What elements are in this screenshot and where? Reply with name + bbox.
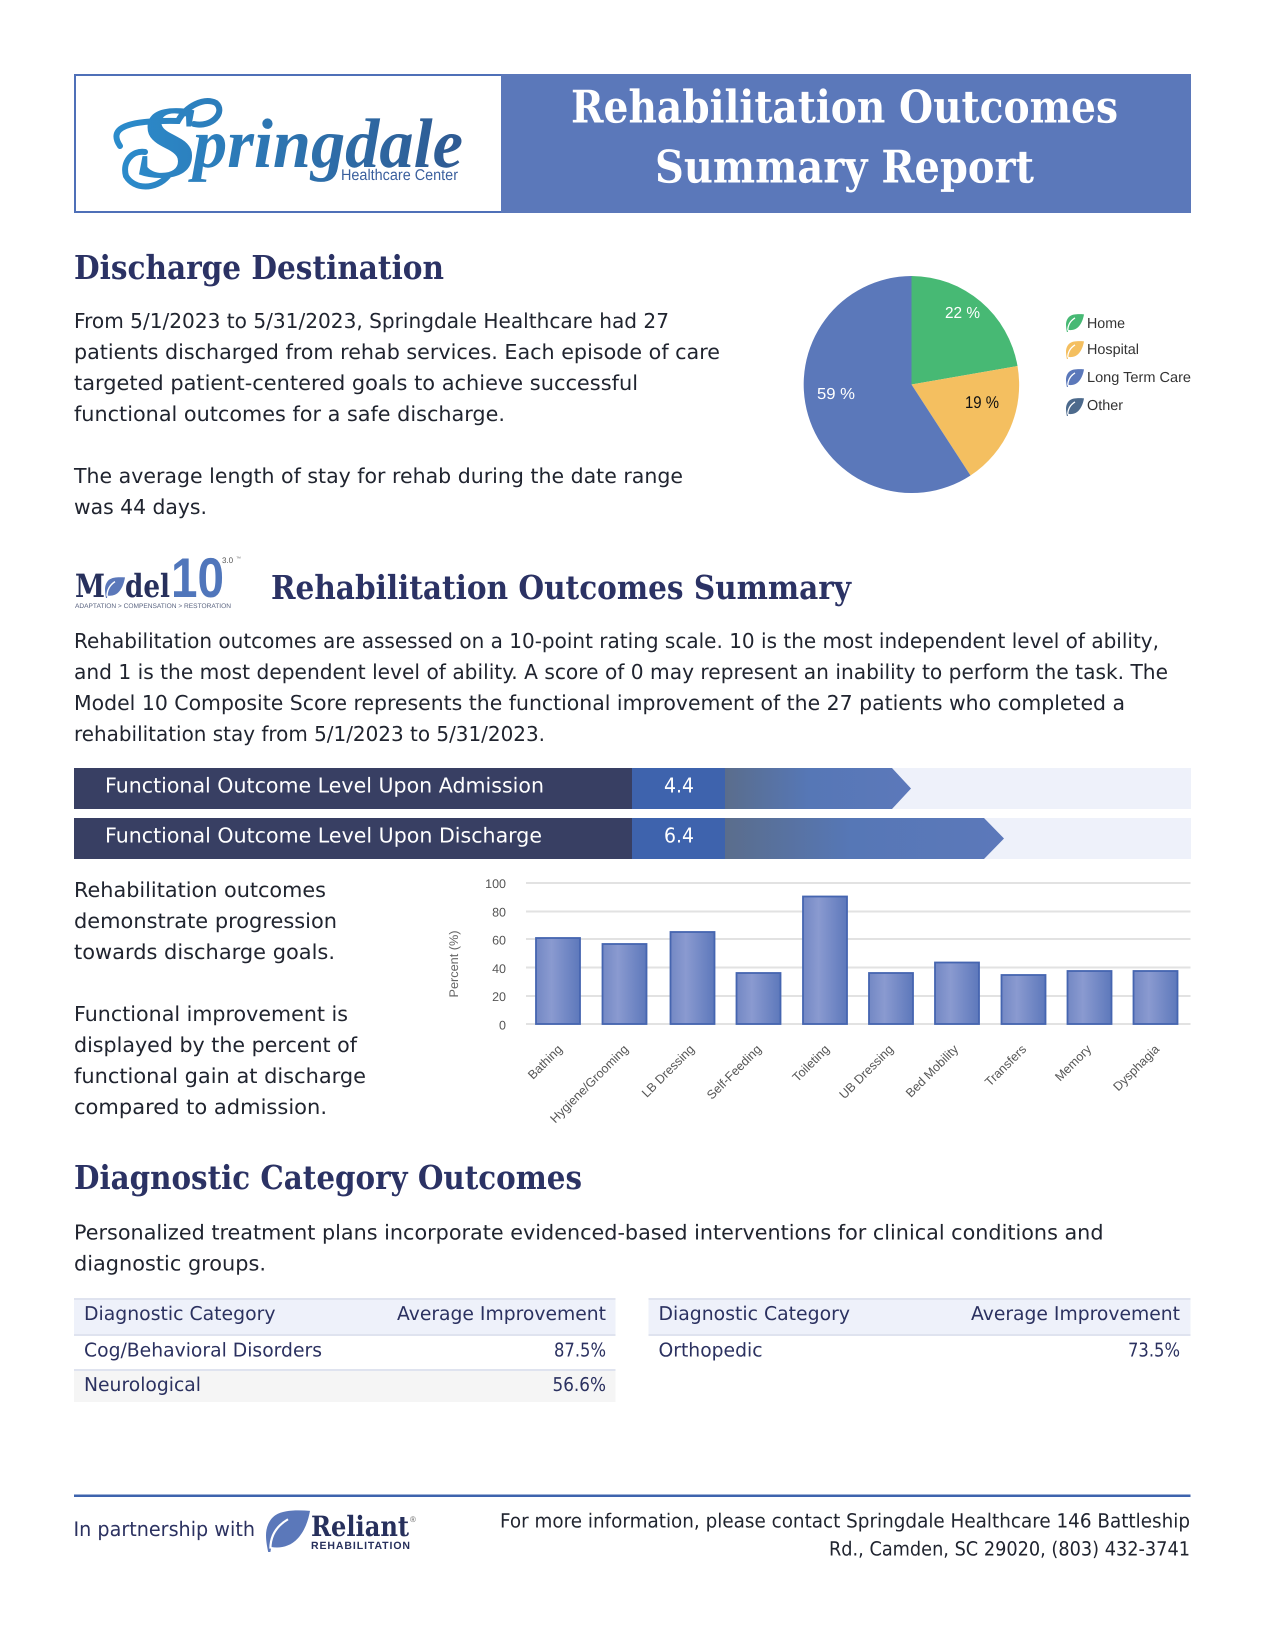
pie legend bbox=[1066, 314, 1191, 416]
text block: rating scale explanation: rehabilitation stay from 5/1/2023 to 5/31/2023. bbox=[74, 722, 545, 746]
legend item: Other: Other bbox=[1087, 398, 1123, 414]
x axis category labels: LB Dressing bbox=[639, 1042, 697, 1100]
text block: rating scale explanation: Rehabilitation outcomes are assessed on a 10-point rating scale. 10 is the most independent level of ability, bbox=[74, 629, 1159, 653]
pie chart: discharge destination: 19 % bbox=[965, 393, 999, 412]
x axis category labels: Toileting bbox=[790, 1042, 832, 1085]
Model 10 logo: del bbox=[125, 567, 170, 605]
report title: Rehabilitation Outcomes bbox=[571, 80, 1118, 134]
header banner bbox=[75, 74, 1191, 213]
legend item: Hospital: Hospital bbox=[1087, 342, 1139, 358]
table: left diagnostic categories: Average Improvement bbox=[397, 1303, 606, 1325]
footer: contact information bbox=[500, 1510, 1190, 1560]
score bar: discharge: 6.4 bbox=[664, 824, 694, 848]
table: left diagnostic categories: 87.5% bbox=[554, 1340, 606, 1362]
footer: partnership credit: In partnership with bbox=[74, 1517, 255, 1541]
text block: functional improvement: towards discharge goals. bbox=[74, 940, 335, 964]
pie chart: discharge destination bbox=[804, 276, 1019, 493]
gridlines and y axis ticks: 80 bbox=[492, 906, 506, 920]
text block: functional improvement: Functional improvement is bbox=[74, 1002, 348, 1026]
x axis category labels: UB Dressing bbox=[837, 1042, 896, 1102]
text block: rating scale explanation bbox=[74, 629, 1168, 746]
x axis category labels bbox=[525, 1042, 1162, 1126]
table: right diagnostic categories: Average Improvement bbox=[971, 1303, 1180, 1325]
score bar: discharge: Functional Outcome Level Upon Discharge bbox=[105, 824, 542, 848]
x axis category labels: Memory bbox=[1052, 1042, 1095, 1084]
text block: discharge summary: From 5/1/2023 to 5/31/2023, Springdale Healthcare had 27 bbox=[74, 309, 669, 333]
text block: functional improvement bbox=[74, 878, 366, 1119]
Reliant Rehabilitation wordmark: ® bbox=[410, 1515, 416, 1524]
text block: functional improvement: displayed by the percent of bbox=[74, 1033, 358, 1057]
gridlines and y axis ticks bbox=[485, 877, 1190, 1032]
text block: functional improvement: functional gain at discharge bbox=[74, 1064, 366, 1088]
gridlines and y axis ticks: 60 bbox=[492, 934, 506, 948]
text block: functional improvement: compared to admission. bbox=[74, 1095, 327, 1119]
text block: functional improvement: Rehabilitation outcomes bbox=[74, 878, 326, 902]
table: left diagnostic categories: Neurological bbox=[84, 1374, 201, 1396]
x axis category labels: Bed Mobility bbox=[903, 1042, 962, 1100]
Model 10 logo: ™ bbox=[236, 556, 241, 562]
text block: discharge summary: patients discharged from rehab services. Each episode of care bbox=[74, 340, 720, 364]
footer: contact information: Rd., Camden, SC 29020, (803) 432-3741 bbox=[829, 1538, 1190, 1560]
table: left diagnostic categories: Diagnostic Category bbox=[84, 1303, 276, 1325]
heading: Diagnostic Category Outcomes: Diagnostic Category Outcomes bbox=[74, 1158, 582, 1197]
heading: Discharge Destination: Discharge Destination bbox=[74, 248, 444, 287]
gridlines and y axis ticks: 0 bbox=[499, 1018, 506, 1032]
Model 10 logo bbox=[75, 546, 241, 610]
pie chart: discharge destination: 59 % bbox=[817, 386, 855, 403]
footer: partnership credit bbox=[74, 1510, 416, 1552]
footer: contact information: For more information, please contact Springdale Healthcare 146 Battleship bbox=[500, 1510, 1190, 1532]
Springdale Healthcare Center logo bbox=[116, 85, 463, 200]
text block: rating scale explanation: Model 10 Composite Score represents the functional improvement of the 27 patients who completed a bbox=[74, 691, 1125, 715]
text block: treatment plans bbox=[74, 1220, 1104, 1276]
table: right diagnostic categories bbox=[648, 1298, 1190, 1362]
table: right diagnostic categories: Diagnostic Category bbox=[658, 1303, 850, 1325]
text block: functional improvement: demonstrate progression bbox=[74, 909, 337, 933]
table: left diagnostic categories bbox=[74, 1298, 616, 1402]
Model 10 logo: M bbox=[75, 567, 105, 605]
gridlines and y axis ticks: 40 bbox=[492, 962, 506, 976]
text block: treatment plans: diagnostic groups. bbox=[74, 1252, 266, 1276]
Model 10 logo: ADAPTATION > COMPENSATION > RESTORATION bbox=[75, 603, 231, 610]
Springdale Healthcare Center logo: pringdale bbox=[188, 106, 463, 183]
text block: rating scale explanation: and 1 is the most dependent level of ability. A score of 0 may represent an inability to perform the task. The bbox=[74, 660, 1168, 684]
Springdale Healthcare Center logo: Healthcare Center bbox=[341, 167, 458, 184]
gridlines and y axis ticks: 100 bbox=[485, 877, 506, 891]
bars bbox=[536, 896, 1178, 1024]
x axis category labels: Transfers bbox=[982, 1042, 1029, 1089]
text block: discharge summary: The average length of stay for rehab during the date range bbox=[73, 464, 683, 488]
icon: Reliant leaf bbox=[266, 1510, 310, 1552]
text block: treatment plans: Personalized treatment plans incorporate evidenced-based interventions for clinical conditions and bbox=[74, 1220, 1104, 1244]
text block: discharge summary: functional outcomes for a safe discharge. bbox=[74, 402, 505, 426]
x axis category labels: Dysphagia bbox=[1110, 1042, 1162, 1094]
text block: discharge summary: was 44 days. bbox=[74, 495, 207, 519]
x axis category labels: Hygiene/Grooming bbox=[548, 1042, 631, 1126]
Model 10 logo: 3.0 bbox=[222, 556, 234, 565]
y axis title: Percent (%) bbox=[447, 930, 461, 998]
text block: discharge summary bbox=[73, 309, 720, 519]
x axis category labels: Bathing bbox=[525, 1042, 565, 1082]
score bar: discharge bbox=[74, 818, 1191, 859]
table: left diagnostic categories: Cog/Behavioral Disorders bbox=[84, 1340, 322, 1362]
Reliant Rehabilitation wordmark: REHABILITATION bbox=[311, 1540, 410, 1552]
table: right diagnostic categories: 73.5% bbox=[1128, 1340, 1180, 1362]
legend item: Home: Home bbox=[1087, 316, 1125, 332]
report title: Summary Report bbox=[655, 140, 1034, 194]
Springdale Healthcare Center logo: S bbox=[137, 85, 199, 200]
heading: Rehabilitation Outcomes Summary: Rehabilitation Outcomes Summary bbox=[271, 568, 852, 607]
bar chart: percent functional gain bbox=[447, 877, 1190, 1126]
table: right diagnostic categories: Orthopedic bbox=[658, 1340, 762, 1362]
gridlines and y axis ticks: 20 bbox=[492, 990, 506, 1004]
x axis category labels: Self-Feeding bbox=[704, 1042, 764, 1102]
text block: discharge summary: targeted patient-centered goals to achieve successful bbox=[74, 371, 638, 395]
score bar: admission bbox=[74, 768, 1191, 809]
Reliant Rehabilitation wordmark: Reliant bbox=[311, 1510, 409, 1543]
legend item: Long Term Care: Long Term Care bbox=[1087, 370, 1191, 386]
table: left diagnostic categories: 56.6% bbox=[552, 1374, 606, 1396]
score bar: admission: Functional Outcome Level Upon Admission bbox=[105, 774, 544, 798]
pie chart: discharge destination: 22 % bbox=[945, 305, 980, 322]
score bar: admission: 4.4 bbox=[664, 774, 694, 798]
Model 10 logo: 10 bbox=[171, 546, 224, 609]
report title bbox=[571, 80, 1118, 194]
